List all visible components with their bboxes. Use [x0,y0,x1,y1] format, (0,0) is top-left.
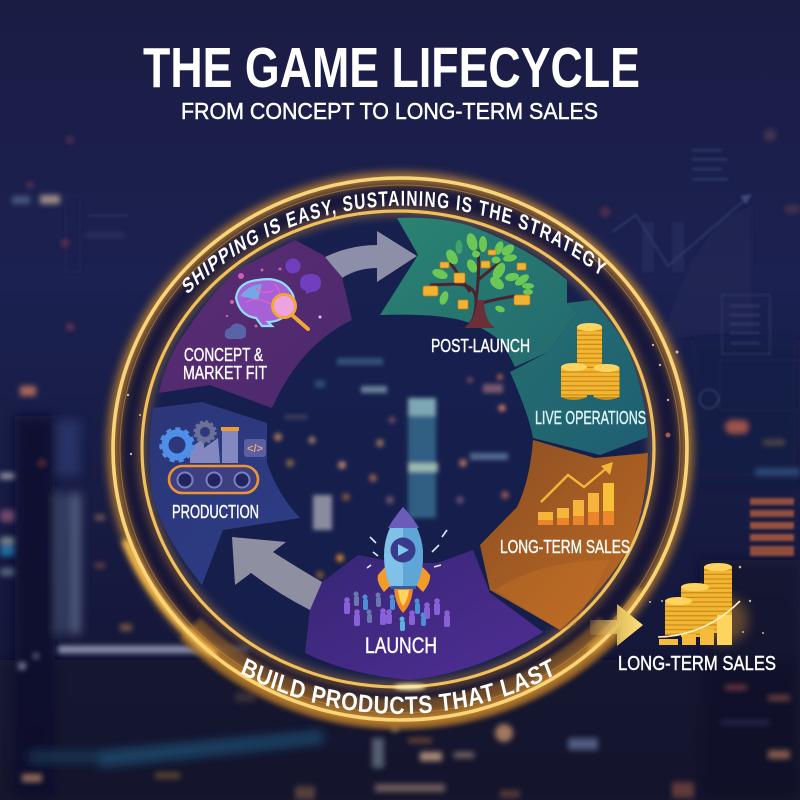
icon: rocket and crowd [344,507,450,631]
golden outer rings [113,178,687,720]
label: post-launch: POST-LAUNCH [431,336,530,356]
icon: brain with magnifier [225,258,322,339]
label: production: PRODUCTION [172,502,259,522]
decorative sparkles [127,344,764,634]
arrow: ring to outer long-term sales [590,604,643,646]
title: THE GAME LIFECYCLE [143,36,640,99]
panel: launch [305,507,543,680]
panel: long-term sales [480,440,648,630]
arrow: concept to post-launch [325,231,417,282]
panel: concept and market fit [159,240,352,408]
ring interior backdrop [142,211,654,687]
icon: factory with gears and conveyor: </> [247,443,263,455]
panel: production [150,402,300,585]
icon: coin stacks [561,323,620,400]
label: live operations: LIVE OPERATIONS [535,408,646,428]
arrow: launch to production [232,537,322,610]
icon: idea clouds [225,258,322,339]
label: concept and market fit: CONCEPT & [184,345,263,365]
label: concept and market fit [183,345,267,383]
label: launch: LAUNCH [365,633,437,658]
label: concept and market fit: MARKET FIT [183,363,267,383]
arc text: shipping is easy, sustaining is the strategy: SHIPPING IS EASY, SUSTAINING IS THE STRATEGY [182,190,607,293]
arc text: build products that last: BUILD PRODUCTS THAT LAST [241,658,552,714]
icon: rising bar chart [538,462,614,525]
icon: money tree [423,232,534,328]
icon: coins and rising bars [658,563,748,645]
panel: post-launch [380,218,577,367]
subtitle: FROM CONCEPT TO LONG-TERM SALES [181,98,598,124]
label: long-term sales: LONG-TERM SALES [500,537,630,557]
panel: live operations [510,300,648,455]
icon: factory with gears and conveyor [161,422,266,493]
